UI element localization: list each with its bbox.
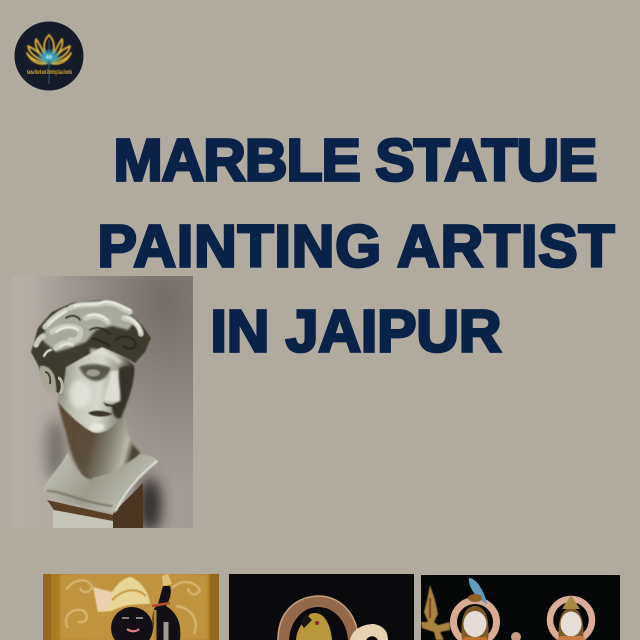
nose [104, 370, 120, 402]
Shiva halo and face [454, 600, 496, 640]
photo: Shiva and Parvati statues on black [421, 575, 620, 640]
turban [93, 577, 150, 612]
bust shadow [46, 418, 66, 482]
shadow side of face [112, 366, 134, 418]
hair light mass [42, 301, 136, 352]
logo: lotus emblem [14, 22, 84, 90]
infographic page: Kamal Murti and Painting Kala Kendra [27, 69, 72, 76]
title: PAINTING ARTIST [98, 213, 614, 279]
hair dark mass [31, 300, 151, 395]
trident [421, 585, 450, 640]
neck [58, 402, 140, 482]
plinth [53, 510, 113, 528]
ear [39, 366, 57, 393]
Parvati halo and face [550, 599, 592, 640]
raised arm [152, 586, 180, 640]
chest [43, 452, 158, 513]
forehead highlight [90, 351, 120, 363]
photo: gold-crowned deity on black [229, 574, 414, 640]
mouth [88, 411, 113, 416]
photo: Shani deity statue on gold panel [43, 574, 219, 640]
hair curls [36, 303, 141, 348]
eye socket [79, 364, 111, 381]
photo: marble bust of David [30, 276, 193, 528]
face [58, 345, 134, 433]
title: MARBLE STATUE [114, 128, 598, 194]
black face [111, 607, 153, 640]
title: IN JAIPUR [210, 298, 502, 364]
title [98, 128, 614, 364]
